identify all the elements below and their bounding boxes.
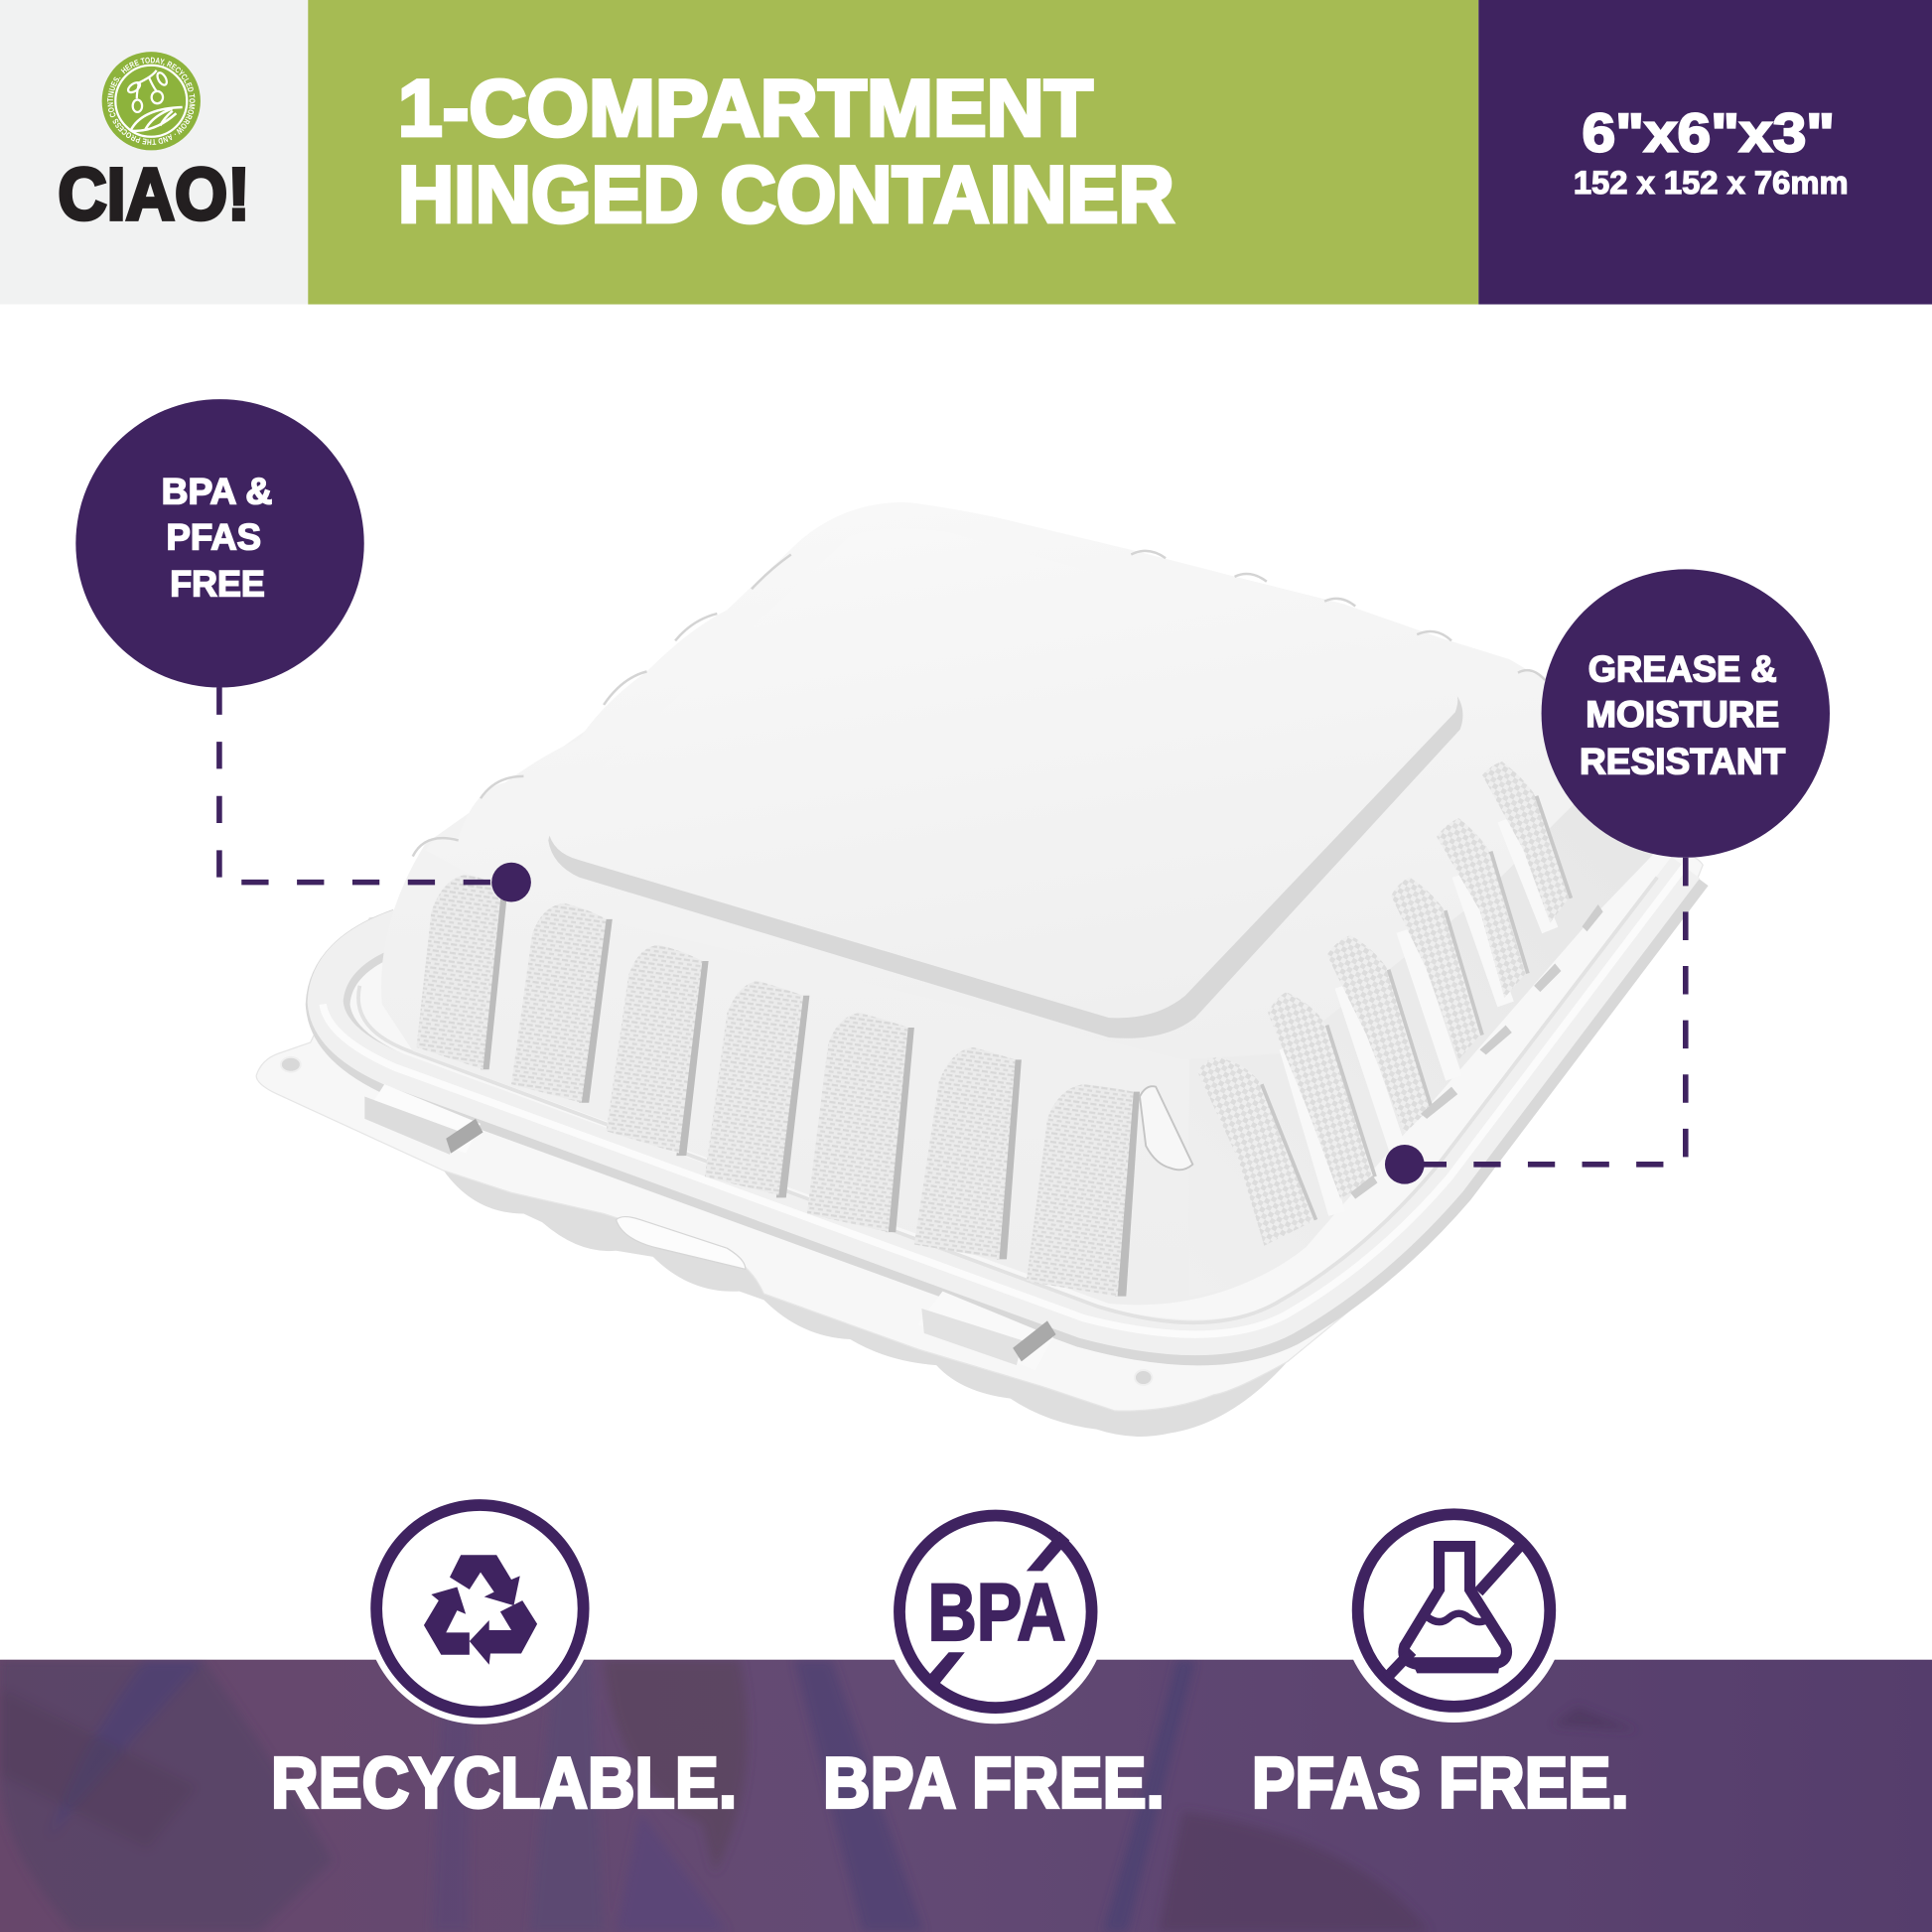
lid edge scallops [413,551,1545,857]
label: recyclable: RECYCLABLE. [271,1744,737,1824]
dimensions panel [1478,0,1932,305]
lower tab cutout [617,1217,746,1269]
flange holes [281,1057,1152,1385]
lid right wall shading [1189,788,1657,1297]
label: PFAS free: PFAS FREE. [1252,1744,1629,1824]
lid plateau edge [548,542,1462,1038]
icon: BPA free [884,1499,1108,1724]
callout: grease and moisture resistant [1542,569,1830,858]
connector: right callout to rim [1385,858,1686,1184]
callout: grease and moisture resistant: RESISTANT [1580,740,1786,781]
title line 2: HINGED CONTAINER [398,150,1174,239]
dimensions inches: 6"x6"x3" [1583,103,1835,164]
flange plate [256,850,1703,1411]
callout: BPA and PFAS free: BPA & [162,471,272,512]
connector: left callout to lid [219,688,531,901]
side textured ribs [1197,761,1569,1246]
callout: BPA and PFAS free: FREE [170,563,265,605]
callout: grease and moisture resistant: MOISTURE [1586,693,1779,735]
icon: recyclable [364,1493,596,1725]
left tab with peg [364,1084,483,1155]
lid top with scalloped edge [425,502,1589,1059]
icon: PFAS free [1342,1498,1566,1723]
lid plateau [548,529,1457,1018]
lid side wall [381,517,1657,1305]
title line 1: 1-COMPARTMENT [398,65,1093,154]
flange lower edge shadow [1378,936,1657,1284]
side rib grooves [1262,796,1571,1220]
right tab with peg [918,1292,1056,1370]
corner clip [1140,1086,1192,1170]
front textured ribs [416,875,1134,1297]
rim ridge [328,873,1691,1343]
scalloped bottom tray [444,1171,1288,1437]
side ridges between ribs [1288,819,1550,1213]
label: BPA free: BPA FREE. [823,1744,1165,1824]
callout: BPA and PFAS free: PFAS [167,516,261,558]
callout: grease and moisture resistant: GREASE & [1588,647,1777,689]
logo emblem: HERE TODAY, RECYCLED TOMORROW · AND THE PROCESS CONTINUES. [107,58,195,145]
footer band with leaf background [0,1660,1932,1932]
header title panel [308,0,1478,305]
icon: BPA free: BPA [928,1568,1066,1658]
callout: BPA and PFAS free [75,399,364,688]
logo wordmark: CIAO! [58,153,250,235]
rim notches [1350,904,1603,1199]
product: hinged container [256,502,1703,1437]
front rib shadows [481,890,1140,1297]
logo panel [0,0,308,304]
dimensions millimetres: 152 x 152 x 76mm [1574,165,1849,201]
